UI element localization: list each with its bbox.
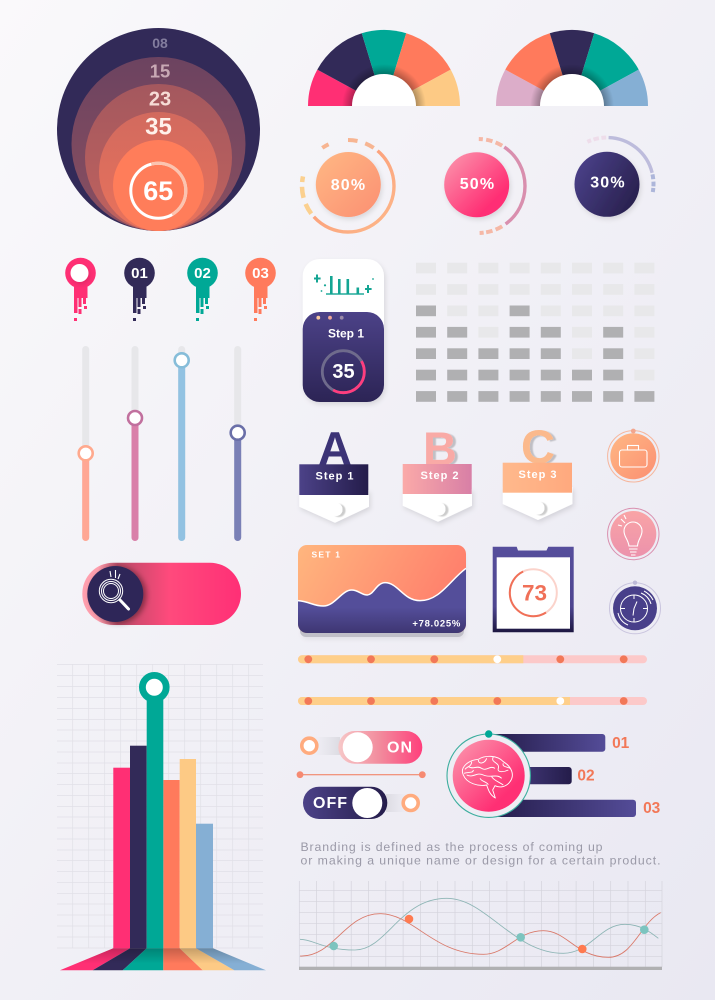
grid behind bar chart <box>57 664 263 948</box>
label 02: 02 <box>577 768 595 784</box>
icon: briefcase <box>608 429 659 482</box>
step tag C <box>503 420 572 520</box>
divider line with dots <box>297 771 426 778</box>
pin marker 01 <box>124 258 155 321</box>
label 01: 01 <box>131 265 148 282</box>
slider 1 <box>79 346 93 541</box>
pin marker blank <box>65 258 96 321</box>
bar yellow <box>180 759 196 948</box>
letter A: A <box>318 422 352 475</box>
clipboard score card <box>493 547 574 632</box>
line chart <box>299 881 662 970</box>
value 65: 65 <box>143 176 173 206</box>
label 03: 03 <box>643 800 661 817</box>
bar teal with ring top <box>142 675 166 948</box>
progress circle 50% <box>431 139 525 233</box>
label 02: 02 <box>194 265 211 282</box>
timeline bar 2 <box>298 697 647 705</box>
icon: light bulb <box>608 508 659 560</box>
icon: clock <box>610 580 660 634</box>
step 1 card <box>303 259 384 402</box>
area chart card <box>298 545 466 637</box>
timeline bar 1 <box>298 655 647 663</box>
label 03: 03 <box>252 265 269 282</box>
search toggle <box>82 563 241 625</box>
value 73: 73 <box>522 580 547 606</box>
label 01: 01 <box>612 735 630 752</box>
bar pink <box>113 768 130 948</box>
label 50%: 50% <box>460 176 495 193</box>
toggle on <box>302 731 422 764</box>
letter B: B <box>423 422 457 475</box>
grey block grid chart <box>416 263 654 402</box>
slider 4 <box>231 346 245 541</box>
teal curve <box>300 898 658 953</box>
value 23: 23 <box>149 88 171 110</box>
value 35: 35 <box>332 361 355 383</box>
red curve <box>300 913 661 957</box>
brain bar chart <box>447 730 661 817</box>
label set 1: SET 1 <box>312 550 341 560</box>
label 80%: 80% <box>331 177 366 194</box>
slider 2 <box>128 346 142 541</box>
label step 1: Step 1 <box>315 470 355 482</box>
label +78.025%: +78.025% <box>412 618 461 630</box>
semicircle chart right <box>496 30 648 106</box>
bar 01 <box>490 734 605 752</box>
perspective floor <box>60 948 266 970</box>
label on: ON <box>387 740 413 756</box>
label step 2: Step 2 <box>420 470 460 482</box>
semicircle chart left <box>308 30 460 106</box>
nested circle chart <box>57 28 260 231</box>
description text <box>300 840 660 868</box>
value 35: 35 <box>145 114 172 140</box>
step label: Step 1 <box>328 326 364 340</box>
letter C: C <box>521 420 555 473</box>
description text: or making a unique name or design for a certain product. <box>300 854 660 868</box>
bar navy <box>130 746 147 948</box>
bar 03 <box>490 800 636 817</box>
icon: magnifier <box>99 570 128 609</box>
bar 02 <box>500 767 572 784</box>
label 30%: 30% <box>590 174 626 192</box>
label step 3: Step 3 <box>518 469 558 481</box>
description text: Branding is defined as the process of coming up <box>300 840 603 854</box>
slider 3 <box>175 346 189 541</box>
icon: bar chart sparkle <box>314 274 374 295</box>
step tag A <box>299 422 369 523</box>
pin marker 02 <box>187 258 218 321</box>
pin marker 03 <box>245 258 276 321</box>
label off: OFF <box>313 795 348 812</box>
progress circle 30% <box>560 138 654 230</box>
value 08: 08 <box>152 35 168 51</box>
bar blue <box>196 824 213 948</box>
icon: brain <box>462 756 512 798</box>
step tag B <box>403 422 472 522</box>
value 15: 15 <box>150 60 170 82</box>
bar orange <box>163 780 180 948</box>
toggle off <box>303 787 418 819</box>
progress circle 80% <box>302 140 394 232</box>
column bar chart <box>60 675 266 970</box>
